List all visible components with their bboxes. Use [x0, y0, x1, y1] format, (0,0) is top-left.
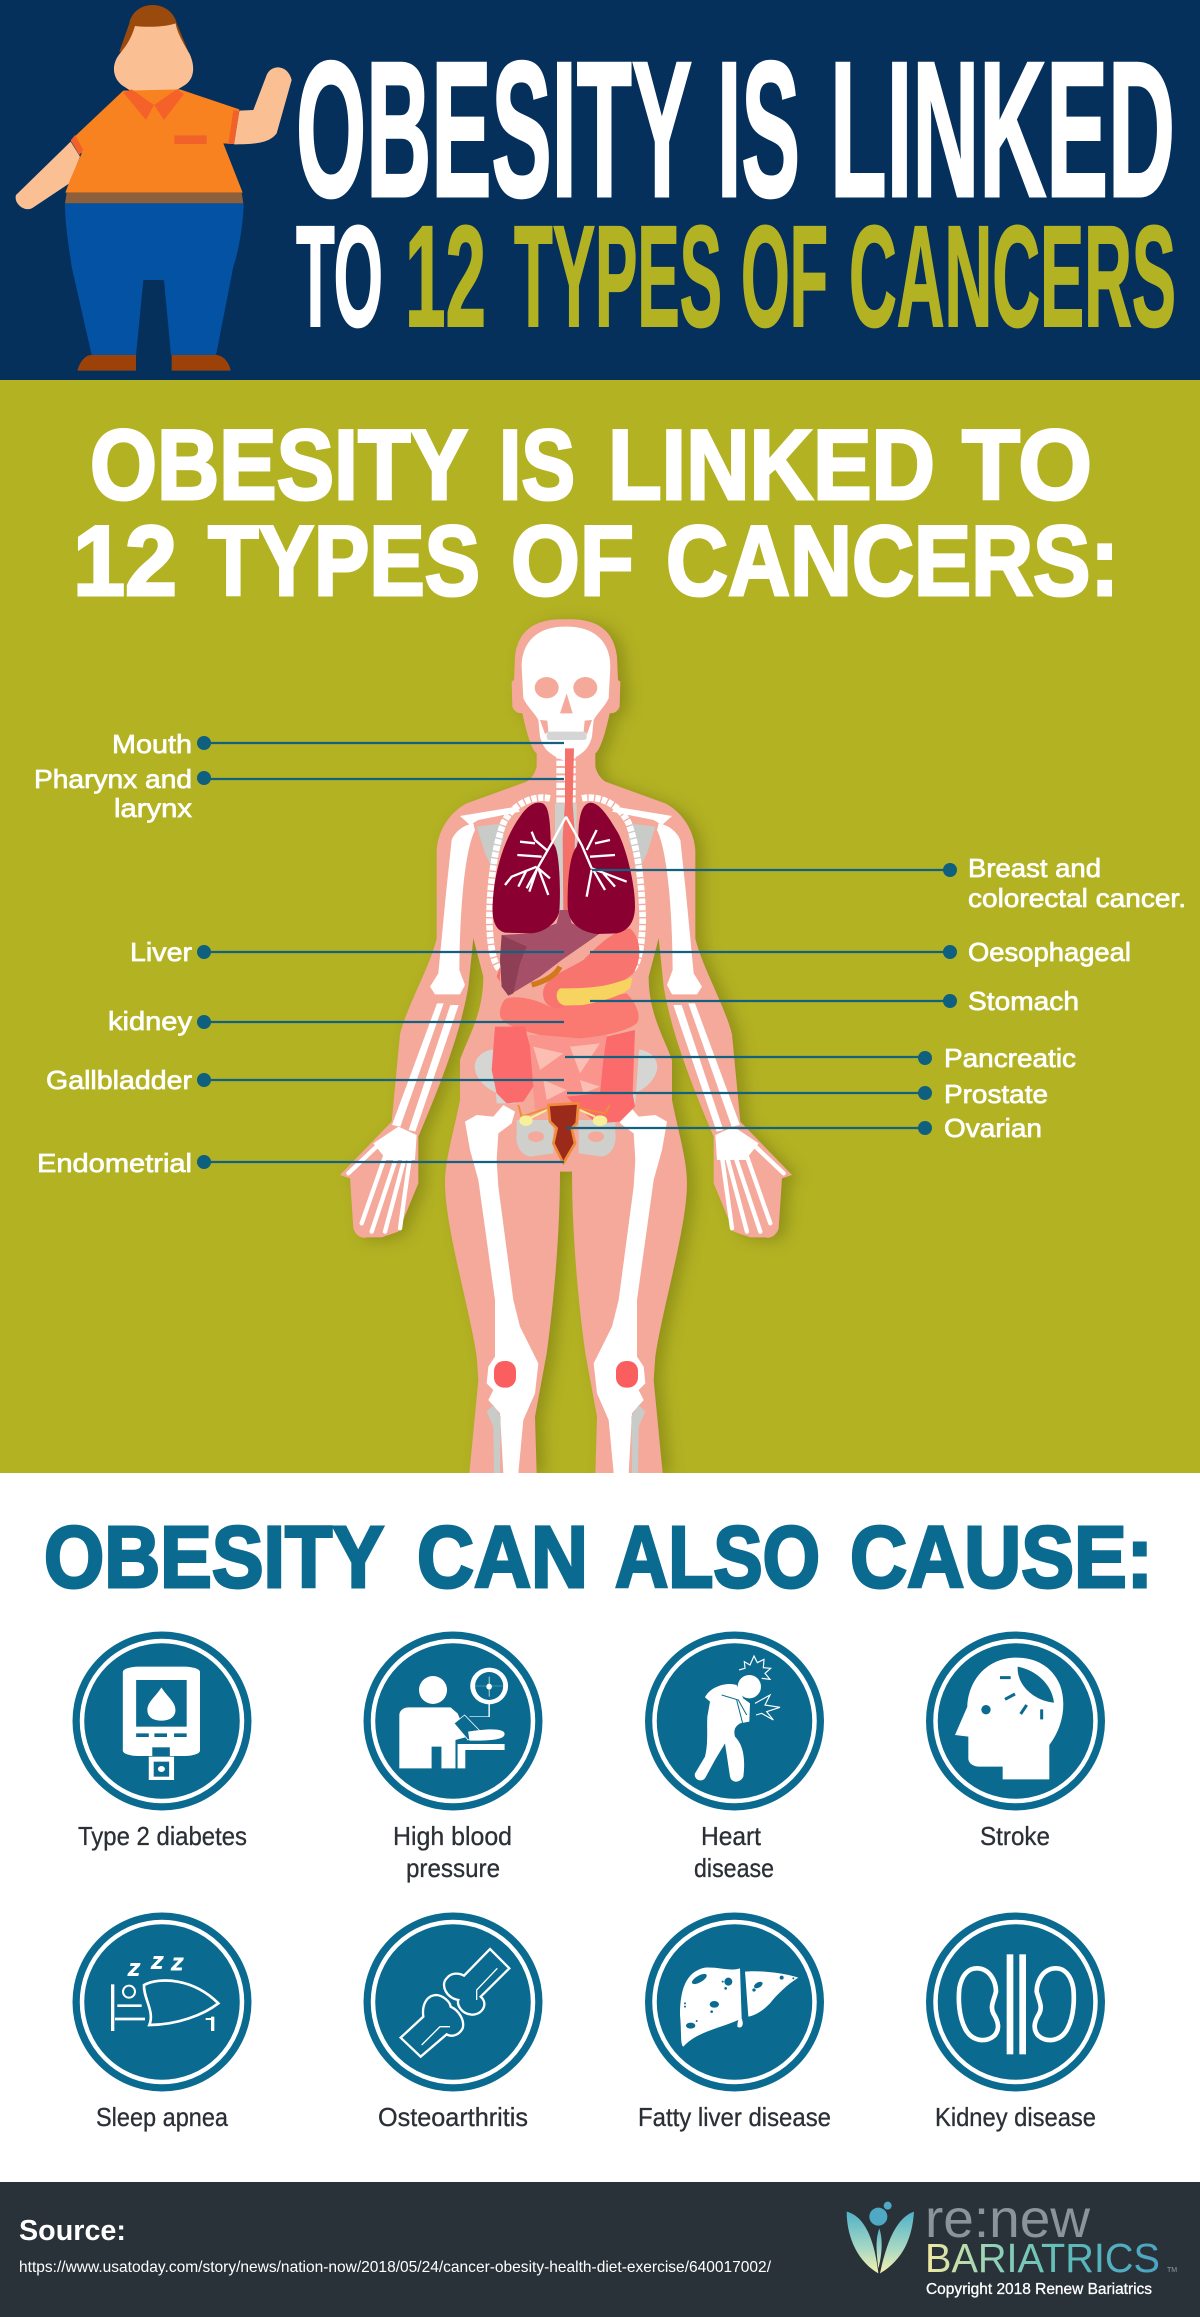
cancer labels: colorectal cancer.: [968, 883, 1186, 913]
cancer labels: Gallbladder: [46, 1065, 192, 1095]
cancer labels: Stomach: [968, 986, 1079, 1016]
cancer labels: Oesophageal: [968, 937, 1131, 967]
panel: cancers: [0, 380, 1200, 1473]
icon: sleep apnea: Z: [151, 1952, 164, 1972]
source heading: Source:: [19, 2215, 126, 2247]
stomach: [543, 928, 639, 1008]
cancer labels: kidney: [108, 1006, 192, 1036]
panel: other conditions: [0, 1473, 1200, 2182]
cancer labels: Endometrial: [37, 1148, 192, 1178]
caption: type 2 diabetes: Type 2 diabetes: [78, 1821, 247, 1851]
source url: https://www.usatoday.com/story/news/nation-now/2018/05/24/cancer-obesity-health-diet-exercise/640017002/: [19, 2259, 772, 2276]
caption: stroke: Stroke: [980, 1821, 1050, 1851]
cancer labels: Pharynx and: [34, 764, 192, 794]
caption: fatty liver disease: Fatty liver disease: [638, 2102, 831, 2132]
title line two: 12: [405, 196, 486, 357]
icon: high blood pressure: [364, 1632, 542, 1810]
heading: obesity can also cause: OBESITY: [44, 1509, 384, 1606]
caption: kidney disease: Kidney disease: [935, 2102, 1096, 2132]
caption: sleep apnea: Sleep apnea: [96, 2102, 228, 2132]
panel: footer: [0, 2182, 1200, 2317]
logo: re:new: re:new: [925, 2189, 1091, 2249]
heading: cancers line one: OBESITY: [90, 409, 468, 520]
logo: trademark: TM: [1167, 2267, 1177, 2274]
caption: heart disease: Heart: [701, 1821, 762, 1851]
caption: heart disease: disease: [694, 1853, 774, 1883]
icon: fatty liver disease: [645, 1912, 824, 2092]
icon: cartoon man waving: [16, 5, 292, 371]
heading: cancers line two: 12: [73, 505, 177, 616]
skeleton: [348, 627, 784, 1473]
title line one: OBESITY: [296, 21, 692, 237]
heading: cancers line one: IS: [499, 409, 575, 520]
lungs: [492, 803, 635, 934]
title line two: OF: [741, 196, 828, 357]
heading: obesity can also cause: CAUSE:: [850, 1509, 1153, 1606]
icon: sleep apnea: Z: [127, 1960, 140, 1980]
heading: cancers line two: CANCERS:: [666, 505, 1119, 616]
icon: stroke: [926, 1632, 1105, 1810]
caption: high blood pressure: [393, 1821, 512, 1883]
cancer labels: Liver: [130, 937, 192, 967]
icon: type 2 diabetes: [72, 1632, 252, 1810]
caption: high blood pressure: High blood: [393, 1821, 512, 1851]
cancer labels: Mouth: [112, 729, 192, 759]
cancer labels: Pancreatic: [944, 1043, 1076, 1073]
title line two: TO: [296, 196, 383, 357]
title line two: TYPES: [514, 196, 722, 357]
body skin silhouette: [340, 619, 792, 1473]
heading: cancers line two: OF: [511, 505, 634, 616]
icon: renew logo mark: [847, 2202, 914, 2273]
caption: heart disease: [694, 1821, 774, 1883]
icon: sleep apnea: Z: [171, 1954, 184, 1974]
icon: osteoarthritis: [364, 1912, 542, 2092]
colon and intestines: [492, 993, 639, 1123]
oesophagus: [563, 748, 575, 912]
cancer labels: Breast and: [968, 853, 1101, 883]
uterus and ovaries: [518, 1103, 610, 1163]
anatomy figure: [340, 619, 792, 1473]
heading: cancers line one: LINKED: [608, 409, 935, 520]
heading: obesity can also cause: ALSO: [615, 1509, 820, 1606]
title line one: IS: [717, 21, 800, 237]
heading: cancers line one: TO: [962, 409, 1092, 520]
pancreas: [557, 977, 633, 1006]
icon: heart disease: [645, 1632, 824, 1810]
gallbladder duct: [532, 967, 560, 985]
title line two: [296, 196, 1176, 357]
panel: header: [0, 0, 1200, 380]
icon: kidney disease: [926, 1912, 1105, 2092]
connector lines: [197, 736, 957, 1169]
heading: obesity can also cause: [44, 1509, 1153, 1606]
caption: high blood pressure: pressure: [406, 1853, 500, 1883]
heading: cancers line two: [73, 505, 1119, 616]
copyright: Copyright 2018 Renew Bariatrics: [926, 2281, 1152, 2298]
logo: bariatrics: BARIATRICS: [925, 2235, 1160, 2281]
liver and gallbladder: [497, 910, 600, 996]
icon: sleep apnea: [72, 1912, 252, 2092]
heading: cancers line one: [90, 409, 1092, 520]
cancer labels: Ovarian: [944, 1113, 1042, 1143]
cancer labels: larynx: [114, 793, 192, 823]
cancer labels: [34, 729, 1186, 1178]
cancer labels: Prostate: [944, 1079, 1048, 1109]
heading: cancers line two: TYPES: [208, 505, 480, 616]
caption: osteoarthritis: Osteoarthritis: [378, 2102, 528, 2132]
heading: obesity can also cause: CAN: [417, 1509, 588, 1606]
